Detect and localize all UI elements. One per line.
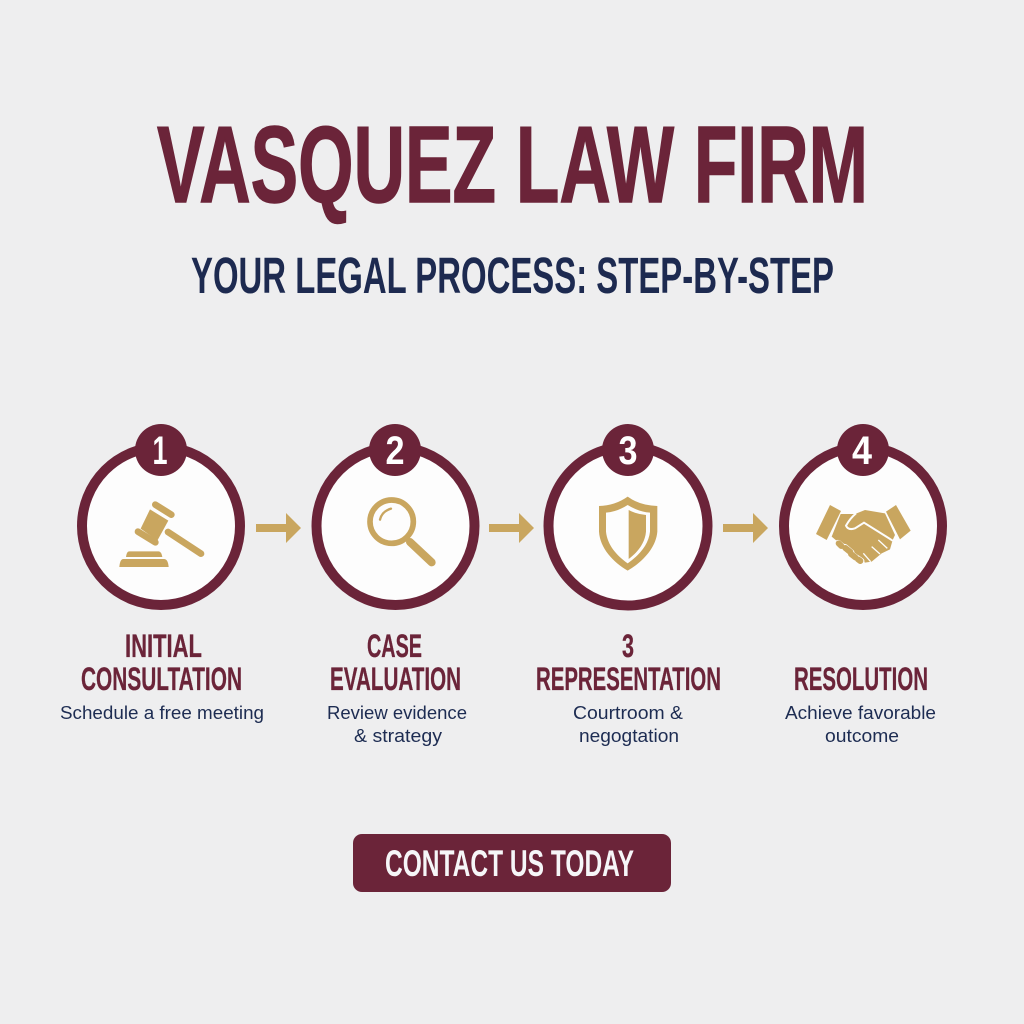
step 1 heading — [81, 628, 242, 697]
step 3 circle — [548, 446, 708, 606]
step 2 description: Review evidence — [327, 702, 467, 723]
step 2 description: & strategy — [354, 725, 443, 746]
arrow 1 to 2 — [256, 513, 301, 543]
step 2 number badge — [369, 424, 421, 476]
step 3 description: Courtroom & — [573, 702, 684, 723]
step 2 number badge: 2 — [386, 429, 404, 473]
contact button: CONTACT US TODAY — [385, 843, 634, 884]
step 3 number badge: 3 — [618, 429, 638, 473]
step 1 number badge — [135, 424, 187, 476]
step 1: initial consultation — [60, 424, 264, 723]
step 2 heading: EVALUATION — [330, 661, 461, 697]
step 3 heading — [536, 628, 721, 697]
step 4 circle — [784, 447, 942, 605]
step 4 description: outcome — [825, 725, 899, 746]
step 3 description — [573, 702, 684, 746]
step 3 description: negogtation — [579, 725, 679, 746]
step 2 circle — [316, 447, 474, 605]
contact button — [353, 834, 671, 892]
step 1 circle — [82, 447, 240, 605]
step 3 heading: REPRESENTATION — [536, 661, 721, 697]
icon: shield — [599, 497, 657, 571]
icon: gavel — [119, 505, 201, 567]
step 1 heading: CONSULTATION — [81, 661, 242, 697]
step 4 heading: RESOLUTION — [794, 661, 928, 697]
step 2 heading — [330, 628, 461, 697]
step 4 description — [785, 702, 936, 746]
icon: magnifying glass — [370, 500, 432, 562]
step 4 number badge: 4 — [852, 429, 873, 473]
arrow 2 to 3 — [489, 513, 534, 543]
step 4 number badge — [837, 424, 889, 476]
step 3 number badge — [602, 424, 654, 476]
step 3: representation — [536, 424, 721, 746]
step 4: resolution — [784, 424, 942, 746]
step 1 number badge: 1 — [152, 429, 168, 473]
step 4 description: Achieve favorable — [785, 702, 936, 723]
arrow 3 to 4 — [723, 513, 768, 543]
step 2 description — [327, 702, 467, 746]
step 1 description: Schedule a free meeting — [60, 702, 264, 723]
step 2 heading: CASE — [367, 628, 422, 664]
step 3 heading: 3 — [622, 628, 634, 664]
step 1 heading: INITIAL — [125, 628, 202, 664]
icon: handshake — [816, 505, 911, 563]
step 2: case evaluation — [316, 424, 474, 746]
